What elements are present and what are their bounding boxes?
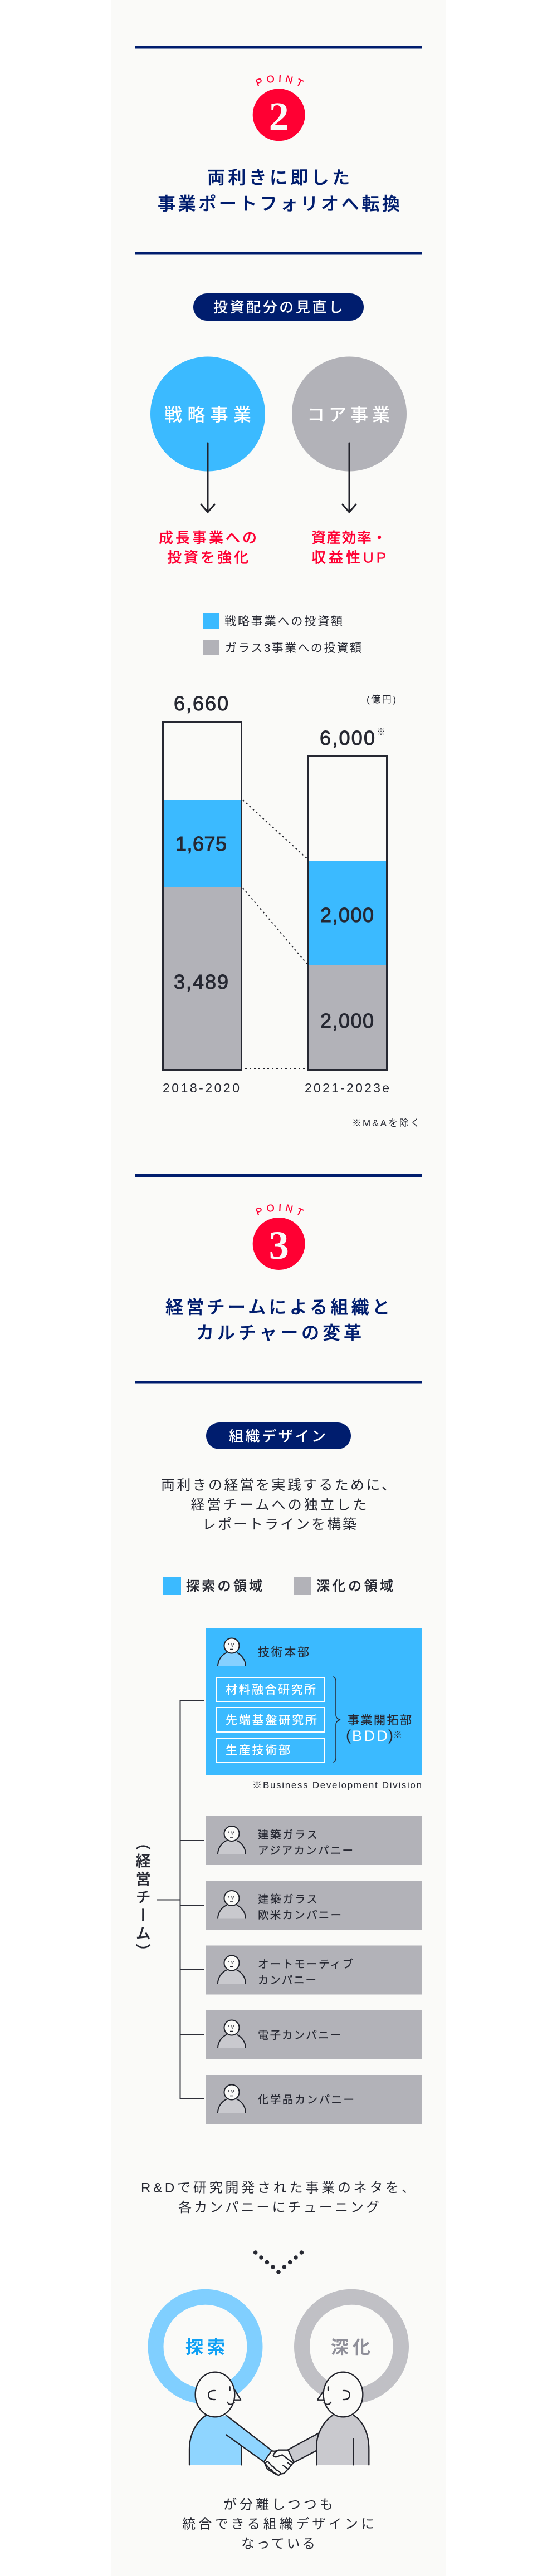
pill heading: organization design: [206, 1422, 351, 1449]
panel: automotive company: カンパニー: [258, 1974, 316, 1986]
BDD label: ): [388, 1727, 393, 1744]
title: point 3: [165, 1297, 390, 1343]
bar: 2018-2020: 2018-2020: [163, 1081, 240, 1095]
BDD label: BDD: [352, 1728, 388, 1744]
title: point 2: 両利きに即した: [207, 168, 350, 188]
panel: technology headquarters: 技術本部: [258, 1646, 309, 1659]
BDD label: [346, 1714, 412, 1744]
closing text: なっている: [241, 2536, 315, 2552]
core business circle and arrow: コア事業: [307, 405, 390, 425]
management team label: （経営チーム）: [134, 1835, 150, 1962]
intro text: 経営チームへの独立した: [190, 1498, 367, 1513]
pill heading: organization design: 組織デザイン: [229, 1428, 326, 1445]
badge: point 2: 2: [269, 94, 289, 139]
bar: 2018-2020: [163, 692, 242, 1095]
dotted chevron arrow: [253, 2250, 304, 2274]
pill heading: investment allocation: [193, 293, 364, 321]
BDD label: (: [346, 1727, 351, 1744]
core business outcome: 収益性UP: [311, 549, 386, 566]
footnote: BDD: ※: [252, 1777, 262, 1791]
lab boxes: 材料融合研究所: [226, 1684, 316, 1696]
illustration: handshake: [189, 2372, 369, 2475]
lab boxes: 先端基盤研究所: [226, 1714, 317, 1727]
intro text: 両利きの経営を実践するために、: [161, 1478, 395, 1493]
strategic business circle and arrow: 戦略事業: [164, 405, 251, 425]
chart legend: 戦略事業への投資額: [224, 615, 343, 628]
panel: architectural glass Europe and America company: 建築ガラス: [258, 1893, 317, 1906]
dotted connectors: [243, 800, 307, 1069]
panel: automotive company: オートモーティブ: [258, 1957, 353, 1971]
right person: [288, 2372, 369, 2465]
panel: chemicals company: [206, 2075, 422, 2124]
panel: automotive company: [206, 1945, 422, 1994]
bar: 2021-2023e: 6,000: [320, 727, 375, 749]
exploitation ring: 深化: [331, 2337, 370, 2357]
background panel: [111, 0, 446, 2576]
panel: architectural glass Asia company: [206, 1816, 422, 1865]
bar: 2021-2023e: 2021-2023e: [305, 1081, 389, 1095]
closing text: 統合できる組織デザインに: [182, 2517, 374, 2532]
panel: electronics company: 電子カンパニー: [258, 2029, 341, 2042]
panel: architectural glass Asia company: 建築ガラス: [258, 1829, 317, 1841]
lab boxes: [217, 1677, 324, 1762]
badge: point 3: 3: [269, 1223, 289, 1268]
core business outcome: [311, 529, 387, 566]
icon: person: [218, 1638, 246, 1666]
exploration ring: 探索: [185, 2337, 225, 2357]
org legend: 深化の領域: [316, 1579, 393, 1594]
strategic business outcome: 投資を強化: [167, 549, 248, 566]
footnote: excluding M&A: M&Aを除く: [363, 1118, 420, 1128]
exploitation ring: [302, 2297, 401, 2396]
strategic business circle and arrow: [150, 356, 265, 512]
badge: point 2: [253, 75, 305, 141]
bar: 2021-2023e: 2,000: [320, 904, 374, 926]
panel: architectural glass Europe and America company: [206, 1881, 422, 1930]
badge: point 3: [253, 1204, 305, 1270]
panel: technology headquarters: [206, 1628, 422, 1775]
section header: point 2: [135, 46, 422, 255]
clasped hands: [264, 2450, 294, 2475]
bar: 2021-2023e: ※: [377, 724, 385, 738]
brace: [333, 1677, 340, 1762]
left person: [189, 2372, 271, 2465]
R&D text: 各カンパニーにチューニング: [178, 2200, 379, 2215]
title: point 2: [158, 168, 400, 214]
closing text: [182, 2498, 374, 2552]
strategic business outcome: [159, 529, 257, 566]
closing text: が分離しつつも: [223, 2498, 333, 2512]
intro text: レポートラインを構築: [202, 1517, 356, 1532]
org legend: [163, 1577, 393, 1595]
footnote: BDD: Business Development Division: [263, 1780, 422, 1790]
footnote: excluding M&A: ※: [352, 1115, 361, 1129]
panel: electronics company: [206, 2010, 422, 2059]
unit label: (億円): [367, 694, 396, 705]
core business circle and arrow: [292, 356, 407, 512]
chart legend: [203, 613, 361, 655]
strategic business outcome: 成長事業への: [159, 529, 257, 546]
panel: architectural glass Asia company: アジアカンパニー: [258, 1845, 353, 1857]
title: point 3: 経営チームによる組織と: [165, 1297, 390, 1317]
title: point 2: 事業ポートフォリオへ転換: [158, 194, 400, 214]
badge: point 2: POINT: [255, 75, 304, 87]
badge: point 3: POINT: [255, 1204, 304, 1216]
footnote: excluding M&A: [352, 1115, 420, 1129]
org connector lines: [157, 1701, 204, 2099]
bar: 2021-2023e: [305, 724, 389, 1095]
section header: point 3: [135, 1174, 422, 1384]
pill heading: investment allocation: 投資配分の見直し: [213, 299, 343, 316]
stacked bar chart: [163, 692, 396, 1095]
BDD label: 事業開拓部: [348, 1714, 412, 1727]
bar: 2018-2020: 6,660: [174, 692, 228, 715]
lab boxes: 生産技術部: [226, 1744, 290, 1757]
org legend: 探索の領域: [186, 1579, 262, 1594]
exploration ring: [156, 2297, 255, 2396]
chart legend: ガラス3事業への投資額: [225, 642, 361, 655]
R&D text: R&Dで研究開発された事業のネタを、: [141, 2180, 415, 2196]
panel: architectural glass Europe and America company: 欧米カンパニー: [258, 1910, 341, 1922]
intro text: [161, 1478, 395, 1532]
BDD label: ※: [393, 1727, 402, 1740]
title: point 3: カルチャーの変革: [196, 1323, 361, 1343]
bar: 2018-2020: 3,489: [174, 970, 228, 993]
bar: 2021-2023e: 2,000: [320, 1009, 374, 1032]
bar: 2018-2020: 1,675: [175, 832, 227, 855]
panel: chemicals company: 化学品カンパニー: [258, 2094, 354, 2106]
R&D text: [141, 2180, 415, 2215]
core business outcome: 資産効率・: [311, 529, 387, 546]
